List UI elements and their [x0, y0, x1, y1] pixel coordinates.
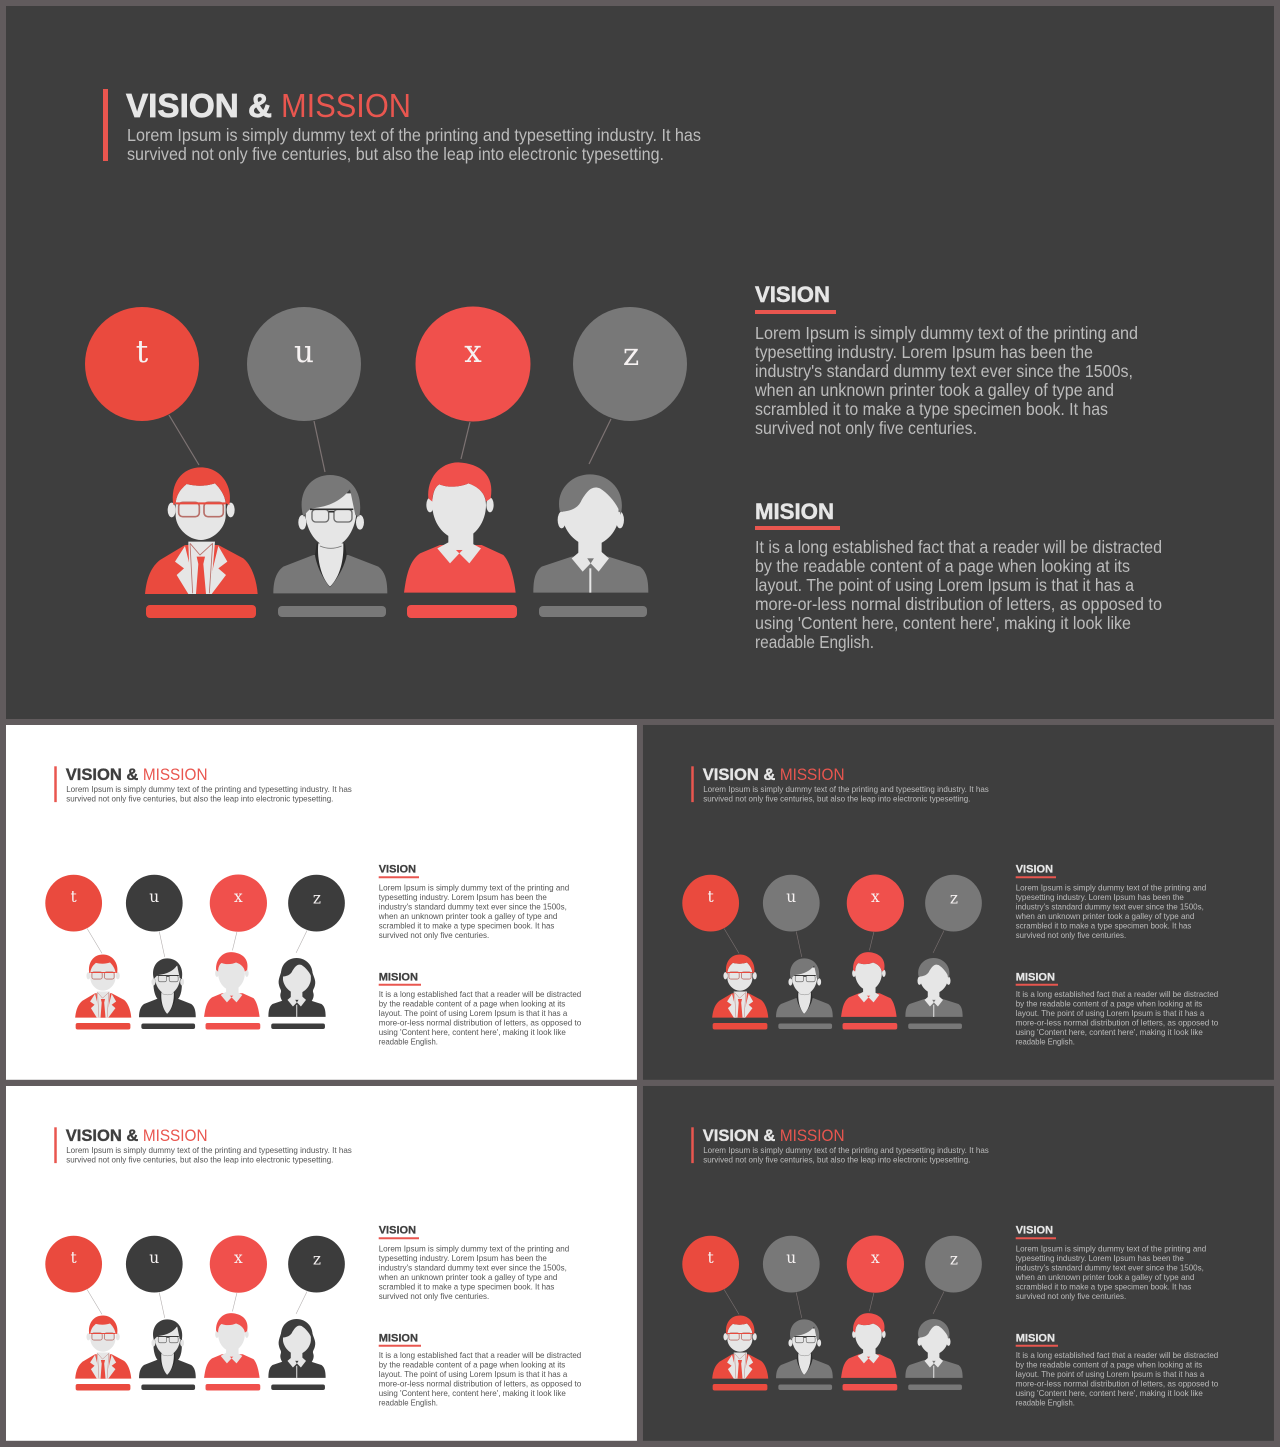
- subtitle: [66, 1145, 352, 1165]
- connector lines: [169, 415, 611, 472]
- mision text: layout. The point of using Lorem Ipsum is that it has a: [1016, 1369, 1204, 1379]
- vision text: typesetting industry. Lorem Ipsum has been the: [755, 342, 1093, 362]
- person 3 with bar: [841, 1313, 897, 1391]
- person 2 with bar: [139, 958, 196, 1029]
- vision text: when an unknown printer took a galley of type and: [754, 380, 1114, 400]
- circle x: [847, 875, 904, 932]
- circle z: [925, 875, 982, 931]
- vision text: scrambled it to make a type specimen book. It has: [1016, 1282, 1192, 1292]
- circle u: [247, 307, 361, 421]
- vision text: Lorem Ipsum is simply dummy text of the printing and: [379, 1244, 569, 1254]
- mision text: readable English.: [1016, 1036, 1075, 1046]
- person 1 with bar: [75, 955, 131, 1030]
- vision text: when an unknown printer took a galley of type and: [378, 911, 557, 921]
- vision text: when an unknown printer took a galley of type and: [1015, 911, 1194, 921]
- circle x: x: [234, 1249, 243, 1267]
- title: VISION &: [66, 1127, 138, 1145]
- subtitle: survived not only five centuries, but also the leap into electronic typesetting.: [66, 1155, 333, 1165]
- mision text: It is a long established fact that a reader will be distracted: [1016, 989, 1218, 999]
- title accent bar: [103, 89, 108, 161]
- title: VISION &: [66, 766, 138, 784]
- circle t: t: [136, 334, 149, 370]
- circle x: [210, 875, 267, 932]
- vision text: Lorem Ipsum is simply dummy text of the printing and: [1016, 1244, 1206, 1254]
- person 2 with bar: [776, 1319, 833, 1390]
- person 2 with bar: [776, 958, 833, 1029]
- circle x: [210, 1236, 267, 1293]
- title accent bar: [54, 1127, 57, 1163]
- circle t: [85, 307, 199, 421]
- subtitle: Lorem Ipsum is simply dummy text of the printing and typesetting industry. It has: [66, 1145, 352, 1155]
- mision text: more-or-less normal distribution of letters, as opposed to: [1016, 1379, 1218, 1389]
- panel: small white slide bottom: [6, 1086, 637, 1441]
- vision text: industry's standard dummy text ever since the 1500s,: [1016, 902, 1204, 912]
- mision text: [1016, 1350, 1218, 1407]
- vision text: [1015, 883, 1206, 940]
- vision text: survived not only five centuries.: [379, 1291, 489, 1301]
- vision heading: VISION: [755, 282, 830, 307]
- mision text: layout. The point of using Lorem Ipsum is that it has a: [379, 1008, 567, 1018]
- person 3 with bar: [204, 952, 260, 1030]
- panel: small white slide top: [6, 725, 637, 1080]
- circle t: [45, 875, 102, 931]
- circle z: [573, 307, 687, 421]
- vision heading: VISION: [1016, 1224, 1053, 1236]
- title: VISION &: [703, 1127, 775, 1145]
- vision text: [1015, 1244, 1206, 1301]
- mision text: by the readable content of a page when looking at its: [1016, 999, 1203, 1009]
- panel: small dark slide bottom: [643, 1086, 1274, 1441]
- person 3 with bar: [404, 462, 517, 618]
- subtitle: survived not only five centuries, but also the leap into electronic typesetting.: [703, 794, 970, 804]
- mision text: [755, 537, 1162, 652]
- circle z: z: [313, 1251, 321, 1269]
- connector lines: [87, 1290, 307, 1318]
- subtitle: [703, 784, 989, 804]
- mision text: by the readable content of a page when looking at its: [1016, 1360, 1203, 1370]
- mision text: by the readable content of a page when looking at its: [379, 999, 566, 1009]
- vision heading: VISION: [1016, 863, 1053, 875]
- circle u: u: [294, 334, 314, 370]
- mision text: using 'Content here, content here', making it look like: [379, 1388, 566, 1398]
- person 4 with bar: [533, 474, 648, 617]
- circle t: t: [71, 1249, 78, 1267]
- vision text: Lorem Ipsum is simply dummy text of the printing and: [1016, 883, 1206, 893]
- vision heading: VISION: [379, 1224, 416, 1236]
- circle u: [763, 875, 820, 931]
- vision text: typesetting industry. Lorem Ipsum has been the: [1016, 1253, 1184, 1263]
- circle u: [126, 875, 183, 931]
- circle t: t: [708, 1249, 715, 1267]
- mision text: [379, 1350, 581, 1407]
- mision text: layout. The point of using Lorem Ipsum is that it has a: [1016, 1008, 1204, 1018]
- mision text: by the readable content of a page when looking at its: [379, 1360, 566, 1370]
- subtitle: survived not only five centuries, but also the leap into electronic typesetting.: [127, 144, 664, 164]
- circle x: x: [234, 888, 243, 906]
- mision text: more-or-less normal distribution of letters, as opposed to: [1016, 1018, 1218, 1028]
- person 4 with bar: [268, 1319, 326, 1390]
- person 1 with bar: [712, 1316, 768, 1391]
- title: MISSION: [143, 766, 208, 784]
- circle z: [288, 1236, 345, 1292]
- person 1 with bar: [75, 1316, 131, 1391]
- person 4 with bar: [905, 958, 963, 1029]
- mision heading: MISION: [755, 499, 834, 524]
- title accent bar: [691, 1127, 694, 1163]
- circle z: [925, 1236, 982, 1292]
- vision text: industry's standard dummy text ever since the 1500s,: [379, 902, 567, 912]
- mision text: It is a long established fact that a reader will be distracted: [755, 537, 1162, 557]
- circle u: u: [786, 1249, 796, 1267]
- vision text: scrambled it to make a type specimen book. It has: [379, 921, 555, 931]
- subtitle: [127, 125, 701, 164]
- circle t: [45, 1236, 102, 1292]
- mision text: more-or-less normal distribution of letters, as opposed to: [379, 1379, 581, 1389]
- subtitle: Lorem Ipsum is simply dummy text of the printing and typesetting industry. It has: [66, 784, 352, 794]
- person 1 with bar: [712, 955, 768, 1030]
- vision text: scrambled it to make a type specimen book. It has: [1016, 921, 1192, 931]
- mision heading: MISION: [1016, 971, 1055, 983]
- connector lines: [724, 1290, 944, 1318]
- title accent bar: [54, 766, 57, 802]
- circle z: [288, 875, 345, 931]
- vision text: survived not only five centuries.: [379, 930, 489, 940]
- vision text: [754, 323, 1138, 438]
- vision heading: VISION: [379, 863, 416, 875]
- subtitle: [703, 1145, 989, 1165]
- circle u: u: [149, 1249, 159, 1267]
- circle u: u: [149, 888, 159, 906]
- mision text: using 'Content here, content here', making it look like: [379, 1027, 566, 1037]
- vision text: industry's standard dummy text ever since the 1500s,: [755, 361, 1133, 381]
- subtitle: survived not only five centuries, but also the leap into electronic typesetting.: [66, 794, 333, 804]
- mision heading: MISION: [379, 971, 418, 983]
- vision text: scrambled it to make a type specimen book. It has: [379, 1282, 555, 1292]
- circle x: x: [871, 888, 880, 906]
- mision heading: MISION: [379, 1332, 418, 1344]
- circle t: t: [708, 888, 715, 906]
- mision text: using 'Content here, content here', making it look like: [755, 613, 1131, 633]
- title: VISION &: [703, 766, 775, 784]
- circle x: [416, 306, 530, 422]
- mision text: using 'Content here, content here', making it look like: [1016, 1388, 1203, 1398]
- person 2 with bar: [273, 475, 387, 617]
- mision text: layout. The point of using Lorem Ipsum is that it has a: [755, 575, 1134, 595]
- mision text: [1016, 989, 1218, 1046]
- circle t: t: [71, 888, 78, 906]
- connector lines: [724, 929, 944, 957]
- vision text: typesetting industry. Lorem Ipsum has been the: [379, 892, 547, 902]
- subtitle: Lorem Ipsum is simply dummy text of the printing and typesetting industry. It has: [127, 125, 701, 145]
- title: MISSION: [281, 87, 411, 124]
- title: MISSION: [143, 1127, 208, 1145]
- person 2 with bar: [139, 1319, 196, 1390]
- connector lines: [87, 929, 307, 957]
- mision heading: MISION: [1016, 1332, 1055, 1344]
- title: MISSION: [780, 766, 845, 784]
- vision text: [378, 1244, 569, 1301]
- circle z: z: [313, 890, 321, 908]
- vision text: scrambled it to make a type specimen book. It has: [755, 399, 1108, 419]
- vision text: industry's standard dummy text ever since the 1500s,: [379, 1263, 567, 1273]
- circle t: [682, 1236, 739, 1292]
- circle z: z: [623, 337, 639, 373]
- circle z: z: [950, 890, 958, 908]
- mision text: It is a long established fact that a reader will be distracted: [1016, 1350, 1218, 1360]
- vision text: typesetting industry. Lorem Ipsum has been the: [1016, 892, 1184, 902]
- mision text: more-or-less normal distribution of letters, as opposed to: [755, 594, 1162, 614]
- mision text: readable English.: [755, 632, 874, 652]
- circle x: x: [464, 334, 482, 370]
- mision text: more-or-less normal distribution of letters, as opposed to: [379, 1018, 581, 1028]
- circle u: [126, 1236, 183, 1292]
- circle z: z: [950, 1251, 958, 1269]
- title accent bar: [691, 766, 694, 802]
- circle u: [763, 1236, 820, 1292]
- subtitle: survived not only five centuries, but also the leap into electronic typesetting.: [703, 1155, 970, 1165]
- vision text: survived not only five centuries.: [1016, 1291, 1126, 1301]
- vision text: when an unknown printer took a galley of type and: [378, 1272, 557, 1282]
- subtitle: Lorem Ipsum is simply dummy text of the printing and typesetting industry. It has: [703, 1145, 989, 1155]
- vision text: survived not only five centuries.: [1016, 930, 1126, 940]
- mision text: [379, 989, 581, 1046]
- person 1 with bar: [145, 467, 258, 618]
- mision text: It is a long established fact that a reader will be distracted: [379, 989, 581, 999]
- subtitle: Lorem Ipsum is simply dummy text of the printing and typesetting industry. It has: [703, 784, 989, 794]
- person 4 with bar: [905, 1319, 963, 1390]
- vision text: typesetting industry. Lorem Ipsum has been the: [379, 1253, 547, 1263]
- vision text: Lorem Ipsum is simply dummy text of the printing and: [379, 883, 569, 893]
- circle t: [682, 875, 739, 931]
- mision text: layout. The point of using Lorem Ipsum is that it has a: [379, 1369, 567, 1379]
- title: MISSION: [780, 1127, 845, 1145]
- vision text: when an unknown printer took a galley of type and: [1015, 1272, 1194, 1282]
- title: VISION &: [126, 87, 272, 124]
- panel: small dark slide top: [643, 725, 1274, 1080]
- circle x: [847, 1236, 904, 1293]
- vision text: Lorem Ipsum is simply dummy text of the printing and: [755, 323, 1138, 343]
- mision text: readable English.: [379, 1036, 438, 1046]
- vision text: survived not only five centuries.: [755, 418, 977, 438]
- person 3 with bar: [841, 952, 897, 1030]
- person 3 with bar: [204, 1313, 260, 1391]
- circle u: u: [786, 888, 796, 906]
- subtitle: [66, 784, 352, 804]
- panel: large dark slide: [6, 6, 1274, 719]
- mision text: by the readable content of a page when looking at its: [755, 556, 1130, 576]
- mision text: readable English.: [379, 1397, 438, 1407]
- vision text: industry's standard dummy text ever since the 1500s,: [1016, 1263, 1204, 1273]
- mision text: It is a long established fact that a reader will be distracted: [379, 1350, 581, 1360]
- person 4 with bar: [268, 958, 326, 1029]
- mision text: using 'Content here, content here', making it look like: [1016, 1027, 1203, 1037]
- vision text: [378, 883, 569, 940]
- circle x: x: [871, 1249, 880, 1267]
- mision text: readable English.: [1016, 1397, 1075, 1407]
